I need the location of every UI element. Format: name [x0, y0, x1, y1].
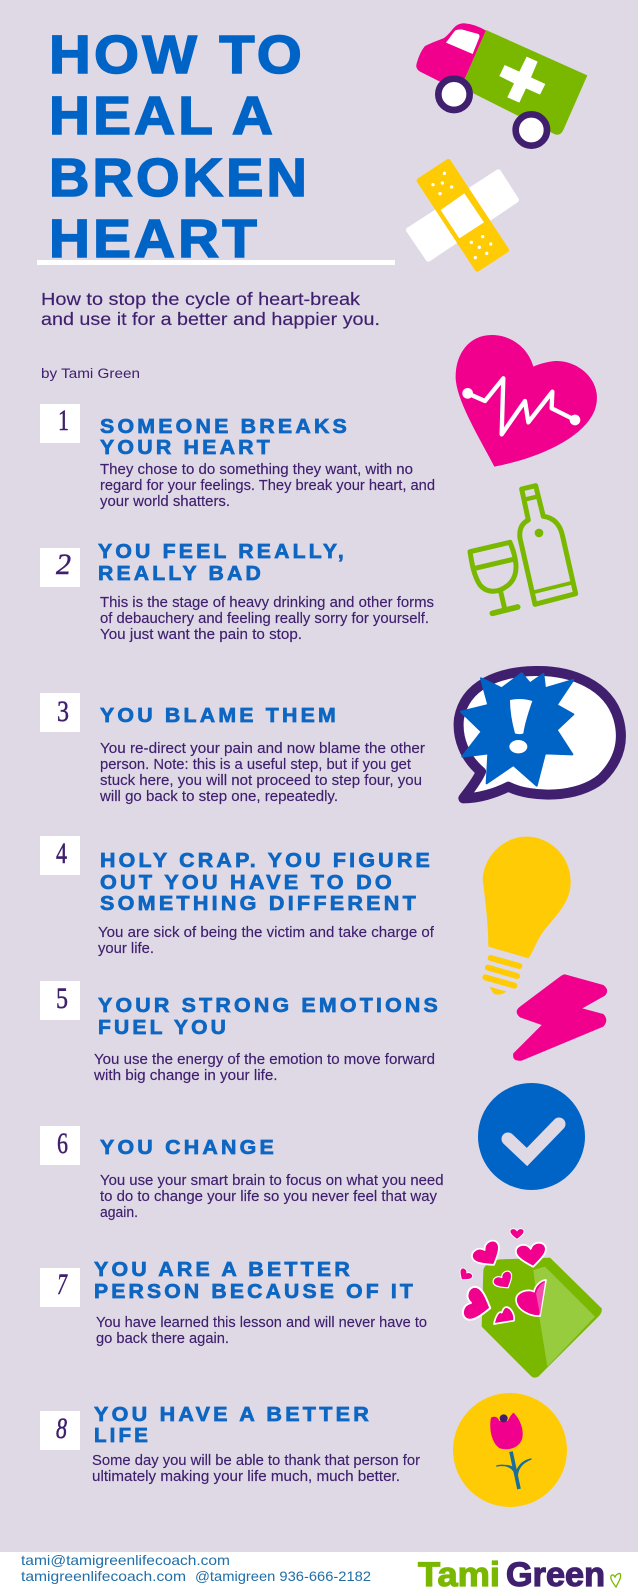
body: step 3: person. Note: this is a useful step, but if you get — [100, 757, 411, 773]
icon: check mark — [478, 1083, 585, 1190]
number badge 3: 3 — [57, 695, 69, 728]
panel: step 5 — [40, 981, 441, 1084]
number badge 3 — [40, 693, 80, 732]
panel: footer — [0, 1552, 638, 1594]
body: step 5: with big change in your life. — [93, 1068, 278, 1084]
heading: step 7: YOU ARE A BETTER — [94, 1259, 353, 1281]
title: HEART — [49, 209, 260, 269]
body: step 2 — [100, 595, 434, 643]
body: step 3 — [99, 741, 425, 805]
icon: lightning bolt — [513, 974, 607, 1061]
body: step 3: stuck here, you will not proceed to step four, you — [100, 773, 422, 789]
icon: envelope with hearts — [456, 1229, 602, 1378]
panel: step 7 — [40, 1259, 427, 1347]
body: step 6: You use your smart brain to focus on what you need — [100, 1173, 444, 1189]
heading: step 1 — [100, 416, 350, 459]
number badge 7 — [40, 1268, 80, 1307]
body: step 7: go back there again. — [96, 1331, 229, 1347]
body: step 8 — [92, 1453, 420, 1485]
body: step 7: You have learned this lesson and will never have to — [96, 1315, 427, 1331]
logo: Tami Green: Green — [506, 1556, 605, 1594]
heading: step 2: REALLY BAD — [98, 563, 264, 585]
panel: step 3 — [40, 693, 425, 805]
number badge 1 — [40, 404, 80, 443]
number badge 2 — [40, 548, 80, 587]
heading: step 5: FUEL YOU — [98, 1017, 229, 1039]
subtitle — [41, 289, 380, 329]
number badge 5 — [40, 981, 80, 1020]
heading: step 7: PERSON BECAUSE OF IT — [94, 1281, 416, 1303]
logo: Tami Green: Tami — [418, 1556, 500, 1594]
icon: ambulance — [416, 23, 587, 146]
body: step 6: again. — [100, 1205, 138, 1221]
title: HOW TO — [49, 25, 305, 85]
icon: speech bubble with exclamation — [459, 671, 621, 798]
heading: step 8: YOU HAVE A BETTER — [94, 1404, 372, 1426]
body: step 4: You are sick of being the victim and take charge of — [98, 925, 435, 941]
body: step 6 — [100, 1173, 444, 1221]
body: step 2: of debauchery and feeling really sorry for yourself. — [100, 611, 429, 627]
number badge 7: 7 — [57, 1268, 68, 1301]
body: step 1 — [100, 462, 435, 510]
body: step 8: ultimately making your life much, much better. — [92, 1469, 400, 1485]
number badge 6: 6 — [57, 1127, 68, 1160]
panel: step 1 — [40, 404, 435, 510]
body: step 8: Some day you will be able to thank that person for — [92, 1453, 420, 1469]
number badge 6 — [40, 1126, 80, 1165]
body: step 2: You just want the pain to stop. — [100, 627, 302, 643]
body: step 3: will go back to step one, repeatedly. — [99, 789, 338, 805]
byline: by Tami Green — [41, 366, 140, 381]
heading: step 8: LIFE — [94, 1425, 151, 1447]
body: step 7 — [96, 1315, 427, 1347]
body: step 1: They chose to do something they want, with no — [100, 462, 413, 478]
body: step 2: This is the stage of heavy drinking and other forms — [100, 595, 434, 611]
heading: step 1: YOUR HEART — [100, 437, 273, 459]
subtitle: How to stop the cycle of heart-break — [41, 289, 360, 309]
heading: step 4: HOLY CRAP. YOU FIGURE — [100, 850, 433, 872]
icon: bandage — [409, 162, 516, 269]
contact details: tami@tamigreenlifecoach.com — [21, 1552, 230, 1568]
body: step 5 — [93, 1052, 435, 1084]
body: step 4 — [98, 925, 435, 957]
heading: step 8 — [94, 1404, 372, 1447]
heading: step 5: YOUR STRONG EMOTIONS — [98, 995, 441, 1017]
number badge 4 — [40, 836, 80, 875]
panel: step 8 — [40, 1404, 420, 1485]
icon: light bulb — [483, 837, 571, 995]
body: step 3: You re-direct your pain and now blame the other — [100, 741, 425, 757]
contact details — [21, 1552, 371, 1584]
body: step 6: to do to change your life so you never feel that way — [100, 1189, 438, 1205]
subtitle: and use it for a better and happier you. — [41, 309, 380, 329]
heading: step 4: OUT YOU HAVE TO DO — [100, 872, 395, 894]
heading: step 2: YOU FEEL REALLY, — [98, 541, 347, 563]
heading: step 4: SOMETHING DIFFERENT — [100, 893, 419, 915]
panel: step 6 — [40, 1126, 444, 1221]
number badge 2: 2 — [56, 548, 71, 581]
number badge 4: 4 — [56, 837, 67, 870]
icon: wine bottle and glass — [470, 486, 576, 613]
number badge 5: 5 — [56, 982, 68, 1015]
heading: step 3: YOU BLAME THEM — [100, 705, 339, 727]
heading: step 6: YOU CHANGE — [100, 1137, 277, 1159]
panel: step 2 — [40, 541, 434, 643]
number badge 1: 1 — [58, 404, 69, 437]
title: HEAL A — [49, 86, 276, 146]
heading: step 4 — [100, 850, 433, 915]
contact details: @tamigreen 936-666-2182 — [195, 1568, 371, 1584]
body: step 5: You use the energy of the emotion to move forward — [94, 1052, 435, 1068]
heading: step 7 — [94, 1259, 416, 1303]
heading: step 1: SOMEONE BREAKS — [100, 416, 350, 438]
number badge 8 — [40, 1411, 80, 1450]
body: step 1: your world shatters. — [100, 494, 230, 510]
number badge 8: 8 — [56, 1412, 67, 1445]
title: BROKEN — [49, 148, 310, 208]
icon: tulip — [453, 1393, 567, 1507]
body: step 4: your life. — [98, 941, 154, 957]
title — [49, 25, 310, 269]
heading: step 2 — [98, 541, 347, 585]
panel: step 4 — [40, 836, 435, 957]
logo: Tami Green — [418, 1556, 621, 1594]
body: step 1: regard for your feelings. They break your heart, and — [100, 478, 435, 494]
icon: heartbeat heart — [456, 335, 597, 467]
heading: step 5 — [98, 995, 441, 1039]
contact details: tamigreenlifecoach.com — [21, 1568, 186, 1584]
